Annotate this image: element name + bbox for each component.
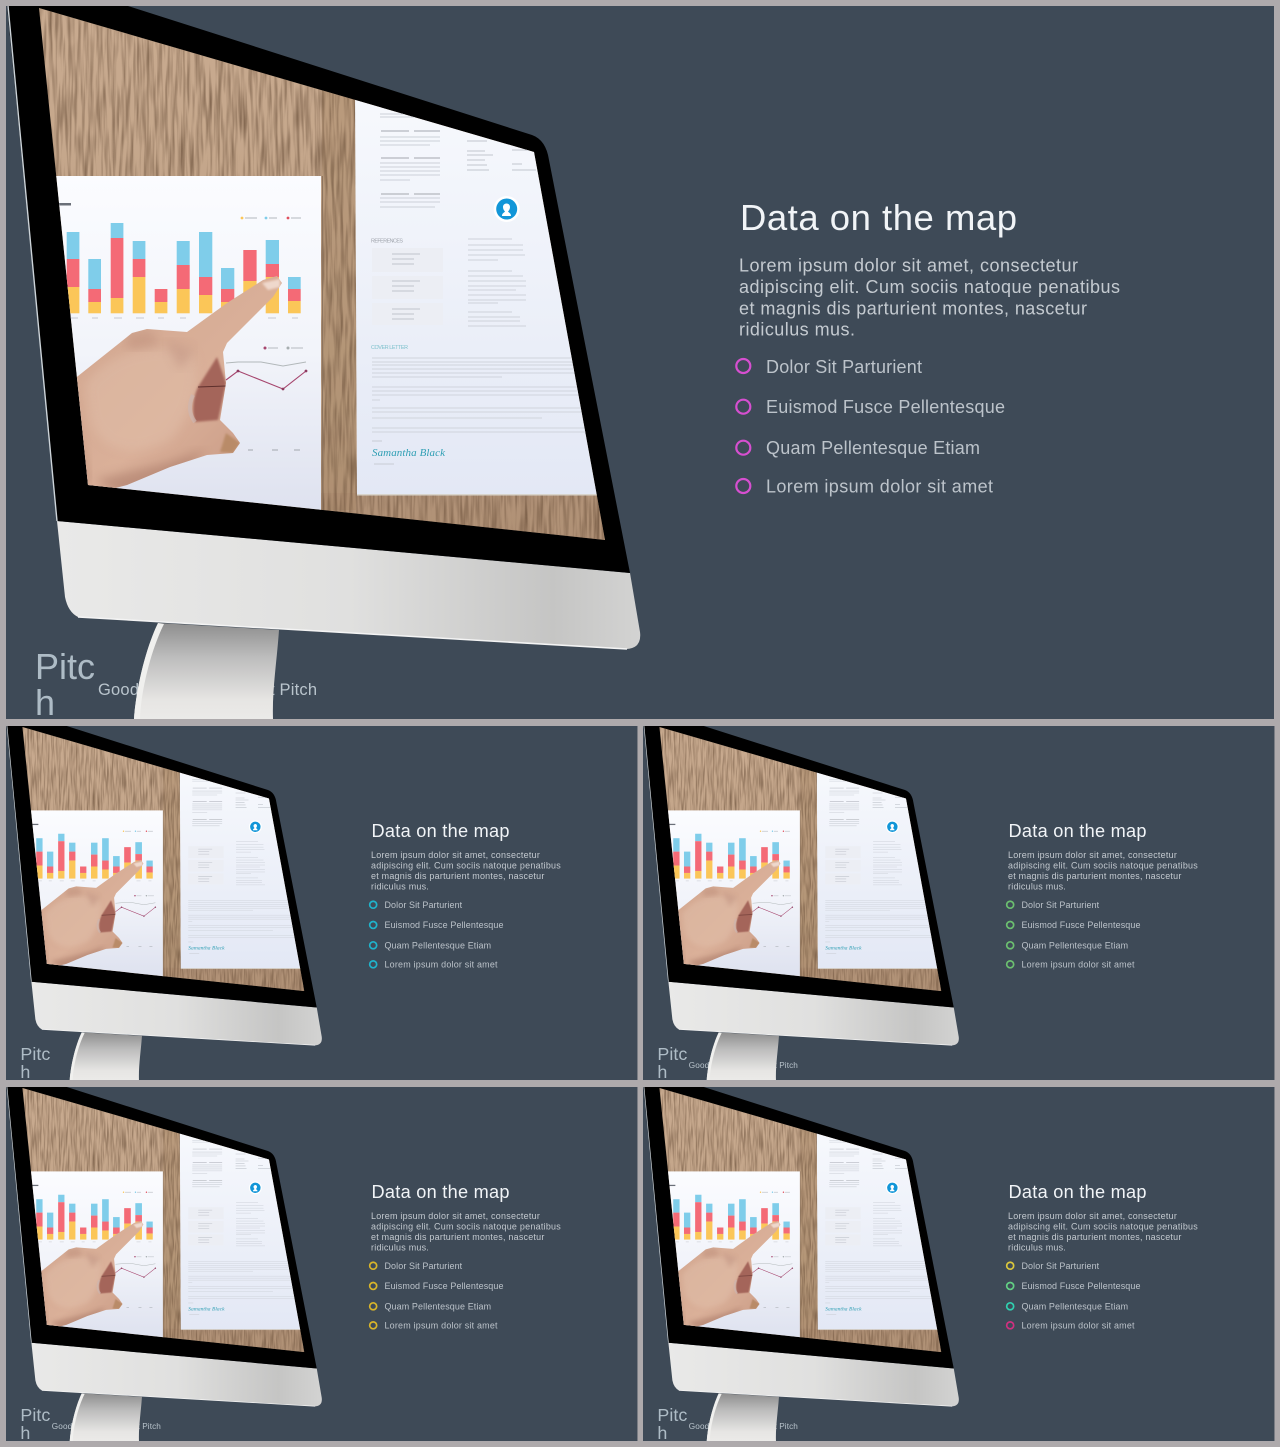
bullet list xyxy=(736,357,1005,496)
signature on screen: Samantha Black xyxy=(825,1306,862,1312)
panel: small slide, green variant xyxy=(643,723,1274,1082)
body text: adipiscing elit. Cum sociis natoque penatibus xyxy=(371,861,561,870)
brand tagline start: Good xyxy=(52,1422,73,1431)
brand tagline start: Good xyxy=(98,681,139,699)
bullet list: Dolor Sit Parturient xyxy=(384,1261,463,1271)
body text: Lorem ipsum dolor sit amet, consectetur xyxy=(371,1211,540,1221)
bullet list: Dolor Sit Parturient xyxy=(384,900,463,910)
bullet list xyxy=(370,1261,504,1331)
body text: et magnis dis parturient montes, nascetur xyxy=(371,871,544,881)
heading: Data on the map xyxy=(372,821,509,841)
body text: et magnis dis parturient montes, nascetur xyxy=(739,298,1087,318)
brand name: h xyxy=(35,682,55,723)
brand name: Pitc xyxy=(657,1405,687,1425)
panel: small slide, cyan variant xyxy=(6,723,637,1082)
brand name xyxy=(657,1044,687,1082)
brand name: Pitc xyxy=(20,1405,50,1425)
bullet list: Euismod Fusce Pellentesque xyxy=(384,1281,504,1291)
monitor screen labels: COVER LETTER xyxy=(371,345,408,351)
bullet list: Lorem ipsum dolor sit amet xyxy=(1021,960,1135,970)
body text: Lorem ipsum dolor sit amet, consectetur xyxy=(1008,1211,1177,1221)
bullet list: Euismod Fusce Pellentesque xyxy=(1021,920,1141,930)
bullet list: Euismod Fusce Pellentesque xyxy=(384,920,504,930)
body text: et magnis dis parturient montes, nascetur xyxy=(371,1232,544,1242)
heading: Data on the map xyxy=(740,197,1017,238)
bullet list: Lorem ipsum dolor sit amet xyxy=(384,1321,498,1331)
bullet list: Lorem ipsum dolor sit amet xyxy=(384,960,498,970)
body text: adipiscing elit. Cum sociis natoque penatibus xyxy=(739,277,1120,297)
brand name xyxy=(20,1405,50,1443)
body text: et magnis dis parturient montes, nascetur xyxy=(1008,871,1181,881)
brand tagline end: t Pitch xyxy=(774,1422,798,1431)
bullet list xyxy=(1007,1261,1141,1331)
monitor screen labels: REFERENCES xyxy=(371,238,403,244)
body text xyxy=(1008,1211,1198,1253)
signature on screen: Samantha Black xyxy=(188,945,225,951)
brand name: Pitc xyxy=(35,646,95,687)
body text: adipiscing elit. Cum sociis natoque penatibus xyxy=(1008,861,1198,870)
bullet list: Quam Pellentesque Etiam xyxy=(1021,940,1128,950)
bullet list: Quam Pellentesque Etiam xyxy=(384,940,491,950)
body text: et magnis dis parturient montes, nascetur xyxy=(1008,1232,1181,1242)
body text xyxy=(739,256,1120,340)
bullet list: Dolor Sit Parturient xyxy=(766,357,922,377)
brand name: Pitc xyxy=(20,1044,50,1064)
brand name: Pitc xyxy=(657,1044,687,1064)
bullet list xyxy=(1007,900,1141,970)
body text: adipiscing elit. Cum sociis natoque penatibus xyxy=(1008,1222,1198,1231)
slide background xyxy=(6,1087,637,1441)
monitor illustration xyxy=(6,723,322,1080)
body text: Lorem ipsum dolor sit amet, consectetur xyxy=(739,256,1078,276)
brand name: h xyxy=(657,1423,667,1443)
brand name: h xyxy=(657,1062,667,1082)
body text xyxy=(1008,850,1198,892)
brand tagline start: Good xyxy=(689,1422,710,1431)
body text: Lorem ipsum dolor sit amet, consectetur xyxy=(1008,850,1177,860)
monitor illustration xyxy=(643,1084,959,1441)
heading: Data on the map xyxy=(1009,821,1146,841)
monitor illustration xyxy=(643,723,959,1080)
monitor screen labels xyxy=(371,238,446,459)
monitor illustration xyxy=(7,0,640,719)
body text xyxy=(371,850,561,892)
bullet list: Euismod Fusce Pellentesque xyxy=(1021,1281,1141,1291)
slide background xyxy=(6,6,1274,719)
body text: ridiculus mus. xyxy=(1008,1243,1066,1253)
bullet list: Dolor Sit Parturient xyxy=(1021,1261,1100,1271)
panel: small slide, yellow variant xyxy=(6,1084,637,1443)
bullet list xyxy=(370,900,504,970)
brand name: h xyxy=(20,1423,30,1443)
body text: ridiculus mus. xyxy=(739,320,855,340)
bullet list: Quam Pellentesque Etiam xyxy=(1021,1301,1128,1311)
monitor illustration xyxy=(6,1084,322,1441)
brand name xyxy=(657,1405,687,1443)
brand tagline start: Good xyxy=(689,1061,710,1070)
bullet list: Lorem ipsum dolor sit amet xyxy=(1021,1321,1135,1331)
bullet list: Dolor Sit Parturient xyxy=(1021,900,1100,910)
bullet list: Euismod Fusce Pellentesque xyxy=(766,397,1005,417)
brand tagline end: t Pitch xyxy=(270,681,317,699)
body text: ridiculus mus. xyxy=(1008,882,1066,892)
panel: main slide xyxy=(6,0,1274,723)
panel: small slide, multicolour variant xyxy=(643,1084,1274,1443)
bullet list: Lorem ipsum dolor sit amet xyxy=(766,476,993,496)
signature on screen: Samantha Black xyxy=(188,1306,225,1312)
brand name xyxy=(35,646,95,723)
monitor screen labels: Samantha Black xyxy=(372,447,446,459)
body text: ridiculus mus. xyxy=(371,882,429,892)
slide background xyxy=(643,726,1274,1080)
body text xyxy=(371,1211,561,1253)
brand name xyxy=(20,1044,50,1082)
heading: Data on the map xyxy=(372,1182,509,1202)
brand tagline end: t Pitch xyxy=(774,1061,798,1070)
brand tagline end: t Pitch xyxy=(137,1422,161,1431)
heading: Data on the map xyxy=(1009,1182,1146,1202)
slide background xyxy=(643,1087,1274,1441)
body text: ridiculus mus. xyxy=(371,1243,429,1253)
body text: adipiscing elit. Cum sociis natoque penatibus xyxy=(371,1222,561,1231)
slide background xyxy=(6,726,637,1080)
body text: Lorem ipsum dolor sit amet, consectetur xyxy=(371,850,540,860)
brand name: h xyxy=(20,1062,30,1082)
bullet list: Quam Pellentesque Etiam xyxy=(766,438,980,458)
signature on screen: Samantha Black xyxy=(825,945,862,951)
bullet list: Quam Pellentesque Etiam xyxy=(384,1301,491,1311)
